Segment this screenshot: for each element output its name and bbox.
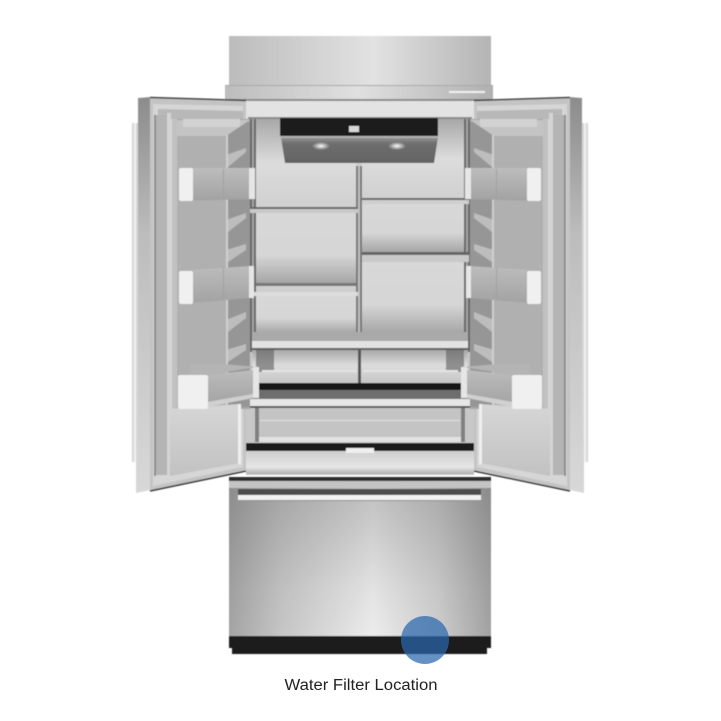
blue water filter marker: [401, 616, 449, 664]
drawer handle: [238, 489, 481, 501]
lower pantry drawer: [250, 383, 470, 442]
bottom freezer drawer: [229, 477, 491, 637]
caption: Water Filter Location: [284, 677, 438, 694]
lower fridge ledge: [246, 443, 474, 474]
left open door: [132, 97, 259, 493]
shelves: [250, 198, 469, 296]
top grille box: [229, 36, 491, 86]
control panel and light hood: [280, 118, 438, 163]
crisper bins: [252, 350, 468, 384]
black kick plate: [229, 636, 491, 654]
right open door: [461, 97, 588, 493]
glass crisper cover: [252, 332, 468, 350]
refrigerator interior: [246, 101, 474, 475]
top trim band with brand badge: [225, 85, 493, 101]
